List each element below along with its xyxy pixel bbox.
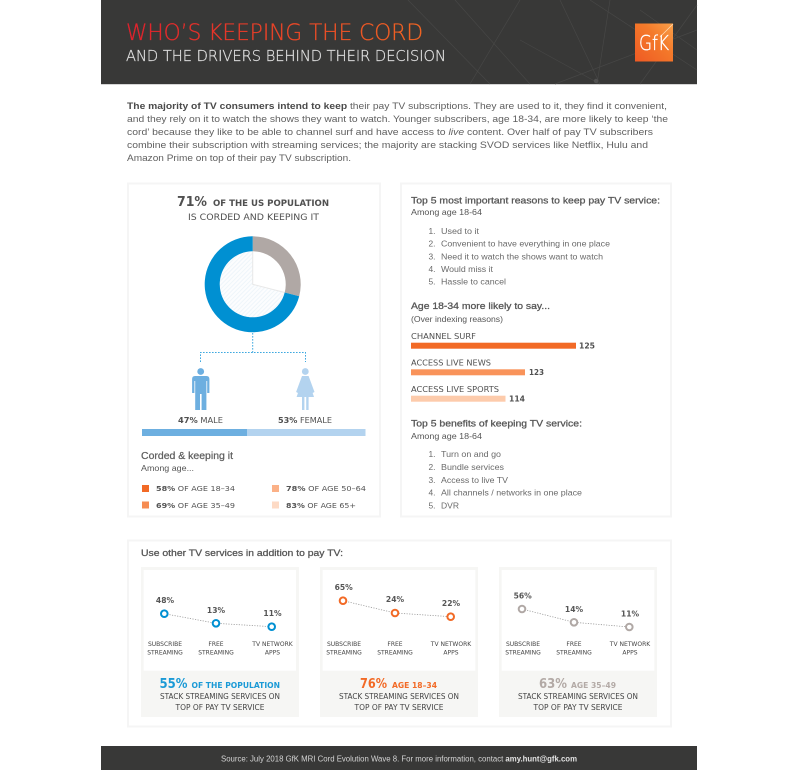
bar chart: over indexing reasons: ACCESS LIVE SPORTS <box>411 385 499 394</box>
gender labels: 53% FEMALE <box>278 416 332 425</box>
line chart: population: STREAMING <box>198 650 234 656</box>
callout: 63% age 35-49: STACK STREAMING SERVICES ON <box>518 692 638 701</box>
callout: 63% age 35-49: AGE 35–49 <box>571 681 616 690</box>
callout: 55% of the population <box>160 676 280 712</box>
line chart: age 35-49: SUBSCRIBE <box>506 641 540 648</box>
callout: 55% of the population: TOP OF PAY TV SERVICE <box>175 703 265 712</box>
callout: 55% of the population: STACK STREAMING SERVICES ON <box>160 692 280 701</box>
line chart: population: TV NETWORK <box>251 641 294 648</box>
line chart: age 35-49: 56% <box>514 592 532 600</box>
list: top 5 reasons: 2. <box>428 238 436 248</box>
callout: 63% age 35-49: TOP OF PAY TV SERVICE <box>533 703 623 712</box>
line chart: age 35-49: 14% <box>565 605 583 614</box>
line chart: age 35-49 <box>505 592 651 656</box>
list: top 5 benefits: 1. <box>428 449 436 459</box>
header band <box>101 0 697 85</box>
line chart: population: SUBSCRIBE <box>148 641 182 648</box>
intro paragraph: The majority of TV consumers intend to keep their pay TV subscriptions. They are used to it, they find it convenient, <box>127 101 667 111</box>
heading: age 18-34 more likely: Age 18-34 more likely to say... <box>411 301 550 312</box>
line chart: age 18-34: 22% <box>442 599 460 608</box>
callout: 76% age 18-34: 76% <box>360 676 387 692</box>
list: top 5 benefits: Access to live TV <box>441 475 508 485</box>
panel: reasons to keep pay TV <box>401 184 671 516</box>
list: top 5 reasons: Would miss it <box>441 264 494 274</box>
list: top 5 benefits: 2. <box>428 462 436 472</box>
line chart: age 18-34: APPS <box>443 650 459 656</box>
line chart: age 35-49: APPS <box>622 650 638 656</box>
icon: male <box>192 368 209 410</box>
heading: top 5 reasons <box>411 196 660 217</box>
logo: GfK: GfK <box>639 31 669 55</box>
gender labels <box>178 416 332 425</box>
card: age 35-49 <box>499 567 657 717</box>
heading: age 18-34 more likely <box>411 301 550 324</box>
legend: age groups: 83% OF AGE 65+ <box>286 501 356 510</box>
list: top 5 benefits: Bundle services <box>441 462 504 472</box>
list: top 5 benefits: 4. <box>428 488 436 498</box>
legend: age groups: 78% OF AGE 50–64 <box>286 484 366 493</box>
intro paragraph: cord’ because they like to be able to channel surf and have access to live content. Over half of pay TV subscribers <box>127 127 653 137</box>
line chart: age 18-34: 65% <box>335 583 353 592</box>
line chart: age 35-49: STREAMING <box>505 650 541 656</box>
intro paragraph: and they rely on it to watch the shows they want to watch. Younger subscribers, age 18-34, are more likely to keep ‘the <box>127 114 668 124</box>
callout: 76% age 18-34: TOP OF PAY TV SERVICE <box>354 703 444 712</box>
line chart: population: 48% <box>156 596 174 605</box>
callout: 63% age 35-49: 63% <box>539 676 567 692</box>
card: age 18-34 <box>320 567 478 717</box>
heading: top 5 benefits: Among age 18-64 <box>411 431 482 441</box>
corded by age heading <box>141 451 233 473</box>
gender labels: 47% MALE <box>178 416 223 425</box>
legend: age groups: 69% OF AGE 35–49 <box>156 501 235 510</box>
heading: top 5 reasons: Among age 18-64 <box>411 207 482 217</box>
dotted connector <box>200 333 306 362</box>
heading: top 5 reasons: Top 5 most important reasons to keep pay TV service: <box>411 196 660 206</box>
list: top 5 benefits: All channels / networks in one place <box>441 488 582 498</box>
line chart: population: 13% <box>207 606 225 615</box>
list: top 5 benefits: Turn on and go <box>441 449 501 459</box>
heading: 71% of the US population: 71% <box>177 194 207 210</box>
line chart: age 35-49: TV NETWORK <box>609 641 651 648</box>
line chart: population: STREAMING <box>147 650 183 656</box>
subtitle: AND THE DRIVERS BEHIND THEIR DECISION <box>126 47 446 65</box>
panel: other TV services <box>128 540 671 726</box>
line chart: age 18-34: STREAMING <box>377 650 413 656</box>
bar chart: over indexing reasons: 123 <box>529 368 544 377</box>
list: top 5 reasons: Hassle to cancel <box>441 276 506 286</box>
line chart: population: FREE <box>208 641 224 648</box>
heading: top 5 benefits <box>411 418 582 441</box>
list: top 5 reasons: 3. <box>428 252 436 262</box>
list: top 5 reasons: Used to it <box>441 226 480 236</box>
bar chart: over indexing reasons <box>411 332 595 404</box>
list: top 5 reasons: 4. <box>428 264 436 274</box>
heading: top 5 benefits: Top 5 benefits of keeping TV service: <box>411 418 582 430</box>
line chart: population <box>147 596 294 656</box>
callout: 55% of the population: OF THE POPULATION <box>192 681 280 690</box>
callout: 76% age 18-34: AGE 18–34 <box>392 681 437 690</box>
list: top 5 reasons: 1. <box>428 226 436 236</box>
title: WHO’S KEEPING THE CORD <box>126 20 423 46</box>
list: top 5 reasons: Convenient to have everything in one place <box>441 238 610 248</box>
heading: age 18-34 more likely: (Over indexing reasons) <box>411 314 503 324</box>
callout: 76% age 18-34 <box>339 676 459 712</box>
intro paragraph: combine their subscription with streaming services; the majority are stacking SVOD services like Netflix, Hulu and <box>127 140 648 150</box>
line chart: age 35-49: STREAMING <box>556 650 592 656</box>
line chart: population: APPS <box>265 650 280 656</box>
panel: corded population <box>128 184 380 516</box>
heading: 71% of the US population: OF THE US POPULATION <box>213 198 329 208</box>
gender split bar <box>142 429 366 436</box>
list: top 5 reasons <box>428 226 610 286</box>
source note: Source: July 2018 GfK MRI Cord Evolution Wave 8. For more information, contact amy.hunt@gfk.com <box>221 754 577 764</box>
bar chart: over indexing reasons: ACCESS LIVE NEWS <box>411 358 491 368</box>
callout: 63% age 35-49 <box>518 676 638 712</box>
bar chart: over indexing reasons: 114 <box>509 394 526 404</box>
line chart: age 18-34 <box>326 583 472 656</box>
callout: 76% age 18-34: STACK STREAMING SERVICES ON <box>339 692 459 701</box>
line chart: age 18-34: SUBSCRIBE <box>327 641 361 648</box>
logo: GfK <box>635 24 673 62</box>
donut chart: 71% <box>205 236 301 332</box>
bar chart: over indexing reasons: CHANNEL SURF <box>411 332 476 341</box>
list: top 5 benefits <box>428 449 582 510</box>
line chart: age 18-34: 24% <box>386 595 404 604</box>
heading: 71% of the US population <box>177 194 329 222</box>
icon: female <box>296 368 314 410</box>
line chart: age 35-49: FREE <box>566 641 582 648</box>
list: top 5 benefits: 5. <box>428 500 436 510</box>
callout: 55% of the population: 55% <box>160 676 188 692</box>
list: top 5 benefits: DVR <box>441 500 459 510</box>
line chart: age 18-34: STREAMING <box>326 650 362 656</box>
line chart: population: 11% <box>263 609 282 618</box>
line chart: age 35-49: 11% <box>621 610 639 618</box>
line chart: age 18-34: TV NETWORK <box>430 641 472 648</box>
heading: use other TV services: Use other TV services in addition to pay TV: <box>141 548 343 559</box>
list: top 5 reasons: Need it to watch the shows want to watch <box>441 252 603 262</box>
corded by age heading: Corded & keeping it <box>141 451 233 462</box>
list: top 5 benefits: 3. <box>428 475 436 485</box>
heading: 71% of the US population: IS CORDED AND KEEPING IT <box>188 212 320 222</box>
corded by age heading: Among age... <box>141 463 194 473</box>
legend: age groups: 58% OF AGE 18–34 <box>156 484 235 493</box>
line chart: age 18-34: FREE <box>387 641 403 648</box>
intro paragraph <box>127 101 668 163</box>
bar chart: over indexing reasons: 125 <box>579 342 595 350</box>
list: top 5 reasons: 5. <box>428 276 436 286</box>
footer band <box>101 746 697 770</box>
legend: age groups <box>142 484 366 510</box>
card: total population <box>141 567 299 717</box>
intro paragraph: Amazon Prime on top of their pay TV subscription. <box>127 153 351 163</box>
